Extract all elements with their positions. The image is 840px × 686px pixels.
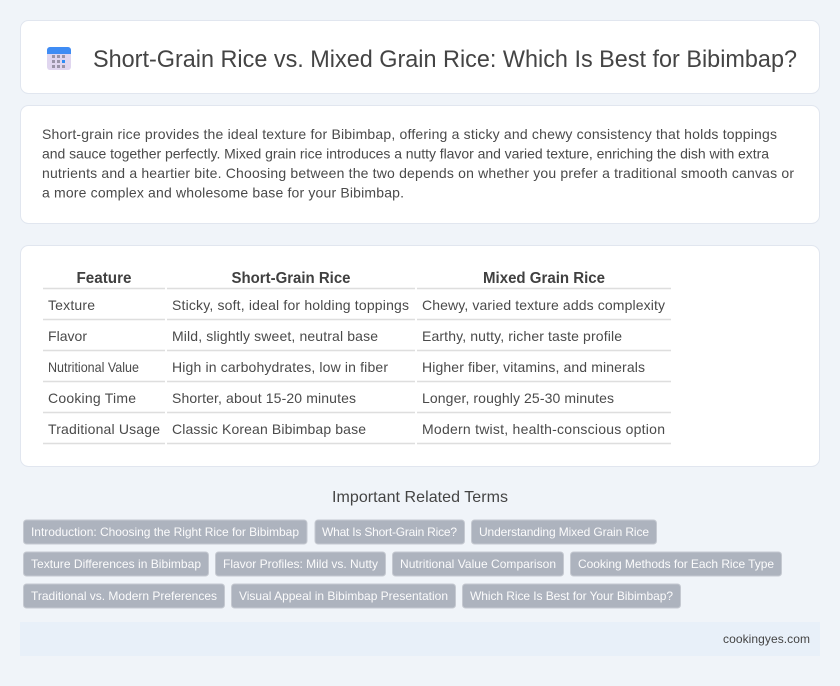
row: traditional usage: Modern twist, health-conscious option [422, 421, 665, 437]
tag: Which Rice Is Best for Your Bibimbap? [470, 589, 673, 603]
row: flavor: Earthy, nutty, richer taste profile [422, 328, 622, 344]
tag [216, 552, 386, 576]
panel: introduction text [20, 106, 820, 224]
row: texture [48, 297, 665, 313]
tag [24, 552, 208, 576]
intro paragraph: Short-grain rice provides the ideal texture for Bibimbap, offering a sticky and chewy consistency that holds toppings [42, 126, 777, 142]
row: traditional usage [48, 421, 665, 437]
icon: calendar [47, 47, 71, 70]
title: Short-Grain Rice vs. Mixed Grain Rice: Which Is Best for Bibimbap? [93, 46, 797, 73]
table rules [43, 288, 671, 444]
tag: Traditional vs. Modern Preferences [31, 589, 217, 603]
tag: Cooking Methods for Each Rice Type [578, 557, 774, 571]
table header: Mixed Grain Rice [483, 270, 605, 287]
panel: comparison table [20, 246, 820, 466]
row: nutritional value [48, 359, 645, 375]
table header: Feature [76, 270, 132, 287]
row: texture: Sticky, soft, ideal for holding toppings [172, 297, 409, 313]
row: cooking time: Cooking Time [48, 390, 136, 406]
table header: Short-Grain Rice [232, 270, 351, 287]
intro paragraph: nutrients and a heartier bite. Choosing between the two depends on whether you prefer a traditional smooth canvas or [42, 165, 794, 181]
row: flavor: Flavor [48, 328, 87, 344]
tag: Nutritional Value Comparison [400, 557, 556, 571]
tag [392, 552, 564, 576]
row: traditional usage: Traditional Usage [48, 421, 160, 437]
tag [315, 520, 464, 544]
tag: Texture Differences in Bibimbap [31, 557, 201, 571]
row: cooking time: Longer, roughly 25-30 minutes [422, 390, 614, 406]
table header [76, 270, 605, 287]
tag [462, 584, 680, 608]
row: nutritional value: Higher fiber, vitamins, and minerals [422, 359, 645, 375]
tag: What Is Short-Grain Rice? [322, 525, 457, 539]
footer [20, 622, 820, 656]
intro paragraph [42, 126, 794, 200]
row: texture: Texture [48, 297, 95, 313]
tag [24, 584, 224, 608]
header panel [20, 20, 820, 94]
row: flavor: Mild, slightly sweet, neutral base [172, 328, 378, 344]
heading: important related terms: Important Related Terms [332, 489, 508, 506]
row: nutritional value: Nutritional Value [48, 359, 139, 375]
row: cooking time: Shorter, about 15-20 minutes [172, 390, 356, 406]
tag [24, 520, 307, 544]
row: traditional usage: Classic Korean Bibimbap base [172, 421, 366, 437]
row: cooking time [48, 390, 614, 406]
tag: Introduction: Choosing the Right Rice for Bibimbap [31, 525, 299, 539]
tag [570, 552, 782, 576]
row: flavor [48, 328, 622, 344]
source credit: cookingyes.com [723, 632, 810, 646]
row: nutritional value: High in carbohydrates, low in fiber [172, 359, 388, 375]
tag [232, 584, 456, 608]
row: texture: Chewy, varied texture adds complexity [422, 297, 665, 313]
related term tags [24, 520, 782, 608]
tag: Visual Appeal in Bibimbap Presentation [239, 589, 448, 603]
intro paragraph: a more complex and wholesome base for your Bibimbap. [42, 184, 404, 200]
tag: Understanding Mixed Grain Rice [479, 525, 649, 539]
tag: Flavor Profiles: Mild vs. Nutty [223, 557, 378, 571]
intro paragraph: and sauce together perfectly. Mixed grain rice introduces a nutty flavor and varied texture, enriching the dish with extra [42, 146, 769, 162]
tag [472, 520, 656, 544]
